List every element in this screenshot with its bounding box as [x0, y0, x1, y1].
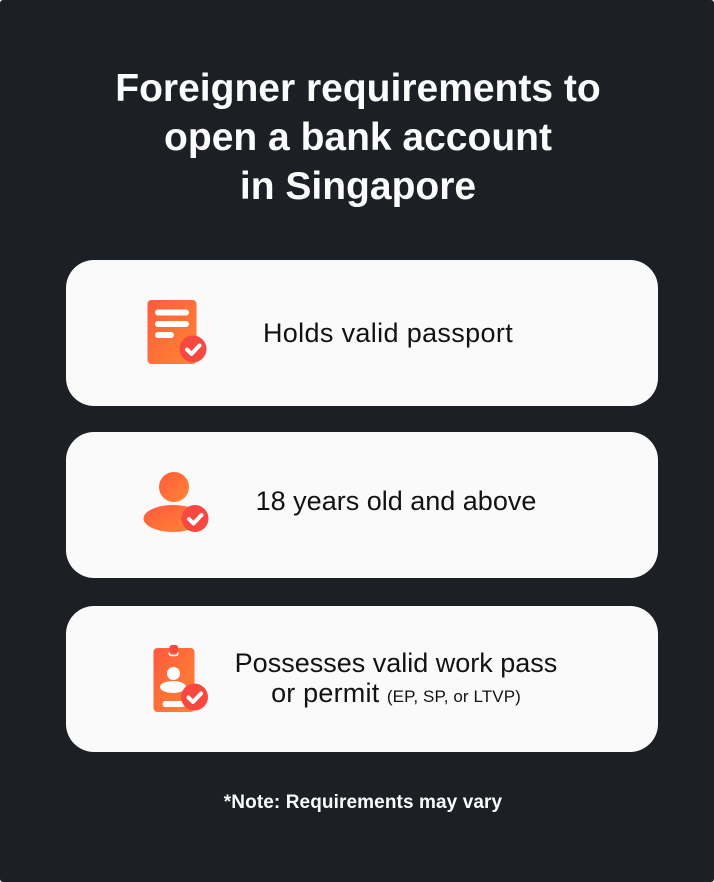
icon: document with check — [148, 300, 206, 364]
panel: work pass — [66, 606, 658, 752]
label: holds valid passport: Holds valid passport — [263, 318, 513, 348]
icon: person with check — [144, 472, 208, 532]
title: open a bank account — [164, 116, 552, 159]
title: Foreigner requirements to — [115, 67, 601, 110]
label: possesses valid work pass — [235, 648, 557, 708]
panel: age requirement — [66, 432, 658, 578]
label: 18 years old and above: 18 years old and above — [256, 486, 536, 516]
icon: ID badge with check — [154, 645, 208, 712]
label: possesses valid work pass: Possesses valid work pass — [235, 648, 557, 678]
footnote: *Note: Requirements may vary — [224, 792, 502, 813]
label: possesses valid work pass: or permit (EP, SP, or LTVP) — [271, 678, 521, 708]
panel: valid passport — [66, 260, 658, 406]
title — [115, 67, 601, 208]
title: in Singapore — [240, 165, 476, 208]
